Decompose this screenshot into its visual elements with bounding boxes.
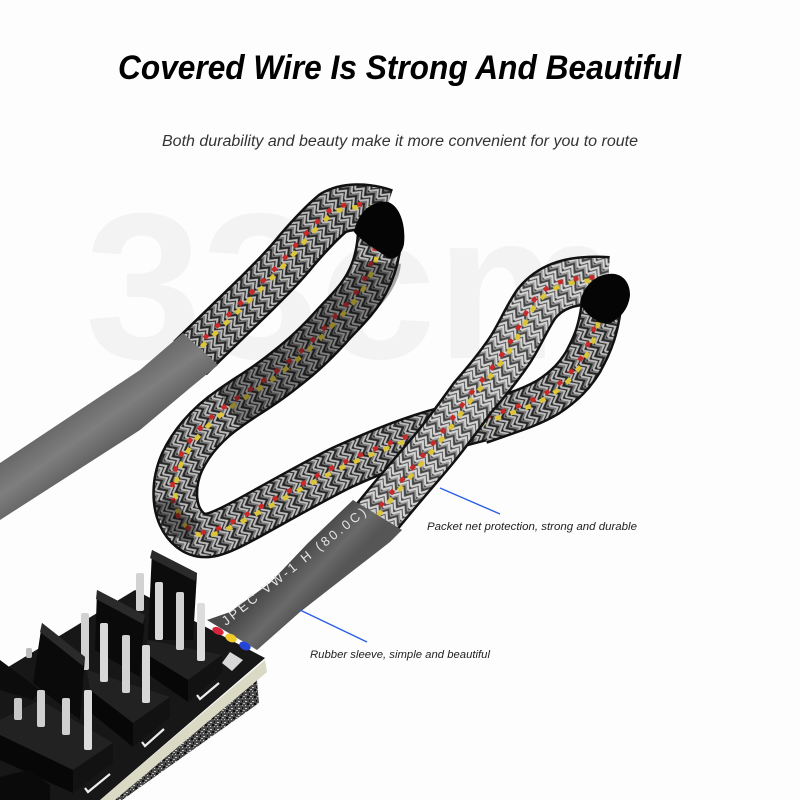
braided cable: second loop (365, 274, 630, 528)
loop opening shadow (580, 274, 630, 324)
foam pad (113, 680, 259, 800)
upper strand (187, 204, 385, 358)
callout: braid: Packet net protection, strong and durable (427, 521, 637, 533)
sleeve print: JPEC VW-1 H (80.0C) (219, 505, 369, 628)
title: Covered Wire Is Strong And Beautiful (118, 49, 682, 87)
silkscreen marks (85, 683, 219, 792)
return strand and lower run (172, 222, 495, 535)
fan header 2 (81, 590, 170, 747)
subtitle: Both durability and beauty make it more convenient for you to route (162, 133, 638, 150)
ghost length watermark: 33cm (85, 171, 623, 403)
solder pad (222, 652, 243, 671)
callout: rubber sleeve (300, 610, 491, 661)
far strand (478, 286, 603, 424)
callout: rubber sleeve: Rubber sleeve, simple and beautiful (310, 649, 491, 661)
braided cable: first loop (167, 202, 495, 535)
upper strand over crossing (365, 278, 608, 528)
board top (0, 590, 265, 800)
fan header 1 (136, 550, 222, 702)
callout: braid (427, 488, 637, 533)
loop opening shadow (354, 202, 404, 258)
fan hub circuit board (0, 550, 267, 800)
dark shading on return strand (230, 262, 380, 408)
lower rubber sleeve cable (207, 500, 402, 650)
upper rubber sleeve cable (0, 333, 218, 520)
dark shading at bottom turn (167, 500, 195, 532)
wire ends (211, 625, 252, 652)
fan header 3 (0, 623, 113, 793)
fan header 4 partial (0, 770, 50, 800)
cream board edge (100, 660, 267, 800)
